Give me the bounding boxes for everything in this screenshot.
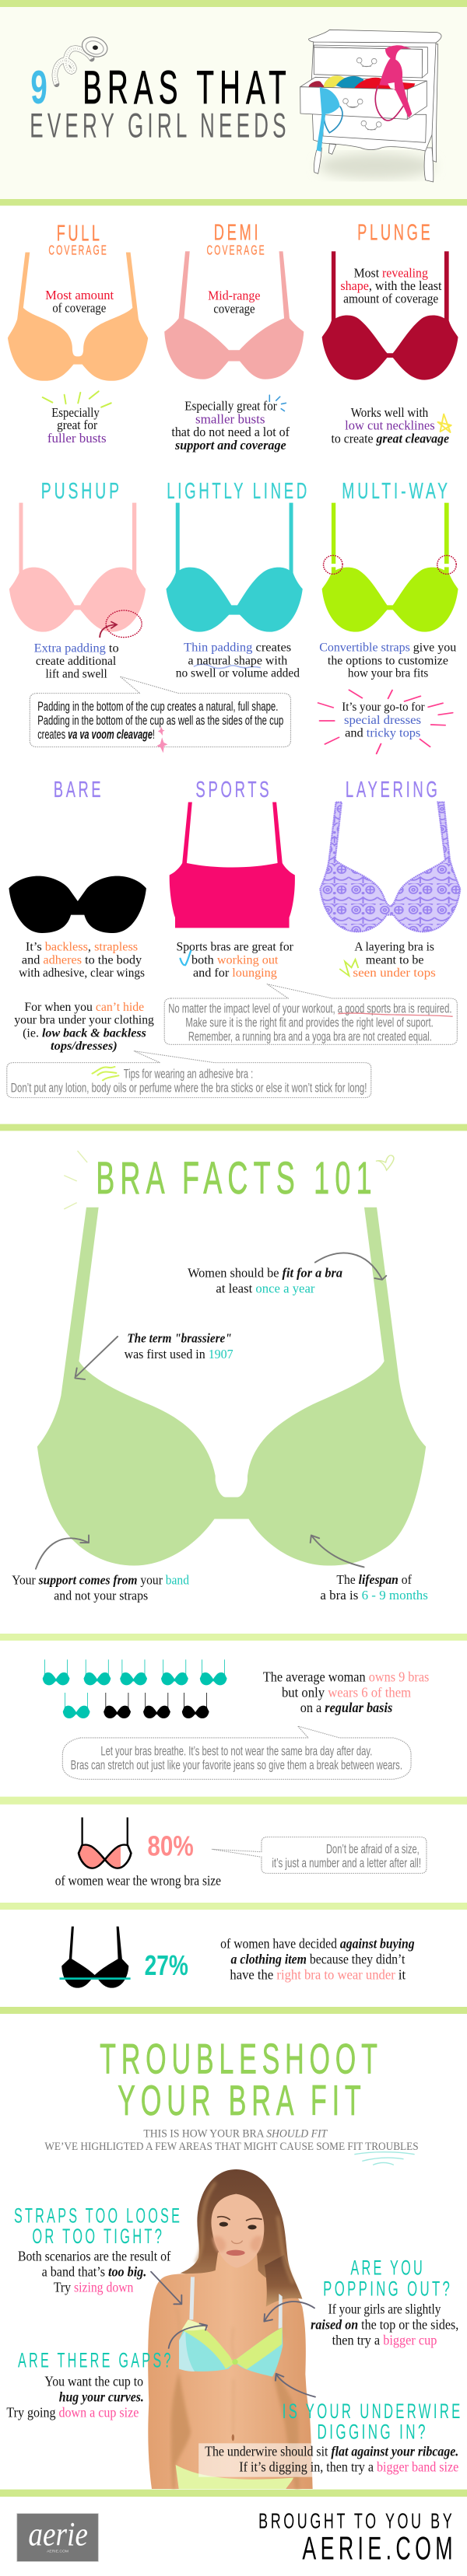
callout: adhesive tips xyxy=(7,1051,371,1098)
text: special dresses xyxy=(342,700,425,739)
text: lifespan xyxy=(320,1572,428,1603)
bra: pushup xyxy=(9,503,146,632)
logo: aerie xyxy=(17,2514,98,2561)
text: mid-range xyxy=(208,289,260,316)
bra: sports xyxy=(170,802,295,928)
text: gaps advice: hug your curves. xyxy=(59,2389,144,2405)
icon: 27 percent bra xyxy=(60,1927,131,1988)
text: seen under tops: meant to be xyxy=(366,952,424,966)
icon: 80 percent bra xyxy=(79,1817,131,1868)
heading: demi coverage: COVERAGE xyxy=(207,242,266,258)
text: most amount: of coverage xyxy=(52,302,106,316)
icon: strap circles xyxy=(324,555,456,574)
heading: full coverage: FULL xyxy=(57,221,103,246)
text: backless strapless xyxy=(19,940,145,980)
title: BRAS THAT xyxy=(83,61,292,114)
arrows: fit callouts xyxy=(151,2272,315,2397)
text: underwire advice xyxy=(205,2444,458,2475)
icon: blue check xyxy=(181,951,191,965)
text: popping advice xyxy=(311,2302,458,2348)
heading: pushup: PUSHUP xyxy=(41,478,122,504)
text: owns 9 bras: The average woman owns 9 bras xyxy=(263,1669,429,1685)
text: seen under tops xyxy=(353,940,436,980)
stat: 80%: 80% xyxy=(147,1831,194,1862)
stat: 27%: 27% xyxy=(145,1950,188,1981)
callout: padding: creates va va voom cleavage! xyxy=(37,727,155,742)
text: backless strapless: with adhesive, clear wings xyxy=(19,966,145,980)
text: gaps advice: Try going down a cup size xyxy=(6,2405,139,2420)
text: extra padding xyxy=(34,641,119,680)
text: seen under tops: A layering bra is xyxy=(354,940,434,953)
panel: translucent text backing xyxy=(198,2443,313,2477)
text: extra padding: Extra padding to xyxy=(34,641,119,655)
icon: pink burst xyxy=(318,690,453,753)
text: seen under tops: seen under tops xyxy=(353,966,436,980)
panel: bra facts xyxy=(12,1151,428,1603)
text: low cut necklines xyxy=(332,407,449,446)
bra: big green xyxy=(37,1208,426,1566)
bra: layering lace xyxy=(320,802,460,931)
panel: pushup xyxy=(9,478,290,753)
text: subtitle: THIS IS HOW YOUR BRA SHOULD FIT xyxy=(143,2127,328,2140)
icon: dresser with bras xyxy=(300,30,441,182)
text: smaller busts: support and coverage xyxy=(174,439,286,453)
heading: full coverage: COVERAGE xyxy=(48,242,108,258)
panel: underwire xyxy=(198,2400,463,2477)
icon: lime squiggle xyxy=(93,1067,118,1080)
heading: troubleshoot xyxy=(100,2036,383,2124)
text: convertible straps: the options to customize xyxy=(328,653,448,667)
bra: lightly lined xyxy=(167,503,303,632)
heading: straps: OR TOO TIGHT? xyxy=(32,2225,164,2248)
callout: sports bra xyxy=(164,984,457,1044)
text: special dresses: and tricky tops xyxy=(345,725,421,739)
bra: full coverage xyxy=(8,252,148,381)
text: lifespan: a bra is 6 - 9 months xyxy=(320,1588,428,1603)
text: most revealing: amount of coverage xyxy=(343,292,438,306)
text: convertible straps xyxy=(319,641,457,680)
text: gaps advice: You want the cup to xyxy=(44,2374,143,2389)
logo: aerie: AERIE.COM xyxy=(47,2550,68,2554)
text: against buying: have the right bra to wear under it xyxy=(230,1968,406,1983)
text: working out: Sports bras are great for xyxy=(177,940,293,953)
icon: lime crown xyxy=(339,959,358,976)
panel: footer xyxy=(0,2490,467,2567)
title: EVERY GIRL NEEDS xyxy=(30,107,290,145)
panel: multi-way xyxy=(318,478,458,753)
panel: troubleshoot xyxy=(0,2007,467,2165)
text: fuller busts xyxy=(47,407,107,446)
icon: yellow star xyxy=(437,414,451,432)
text: most revealing: shape, with the least xyxy=(340,280,442,293)
text: fit once a year: at least once a year xyxy=(216,1281,315,1296)
text: thin padding: no swell or volume added xyxy=(176,666,300,680)
text: wrong bra size: of women wear the wrong bra size xyxy=(55,1873,221,1889)
text: low cut necklines: Works well with xyxy=(351,407,428,420)
panel: bare xyxy=(9,777,154,1053)
heading: underwire xyxy=(283,2400,463,2444)
icon: rays and heart xyxy=(64,1151,394,1209)
text: thin padding: Thin padding creates xyxy=(184,641,292,654)
text: can't hide xyxy=(14,1000,154,1053)
bra: bare xyxy=(9,876,146,933)
panel: plunge xyxy=(322,220,458,446)
text: working out xyxy=(177,940,293,980)
bra: plunge xyxy=(322,251,458,380)
logo: aerie: aerie xyxy=(28,2515,88,2553)
text: mid-range: Mid-range xyxy=(208,289,260,303)
text: brassiere xyxy=(125,1331,234,1361)
text: most amount xyxy=(45,288,114,316)
text: straps advice: a band that’s too big. xyxy=(42,2264,146,2280)
text: fuller busts: great for xyxy=(57,419,98,432)
callout: padding xyxy=(30,676,290,753)
heading: sports: SPORTS xyxy=(195,777,272,802)
panel: gaps xyxy=(6,2349,174,2420)
text: straps advice xyxy=(18,2249,171,2295)
heading: straps xyxy=(14,2204,182,2248)
icon: tape measure xyxy=(54,34,110,84)
divider band: facts xyxy=(0,1124,467,1131)
text: brought to you by xyxy=(258,2510,457,2567)
panel: straps too loose xyxy=(14,2204,182,2295)
arrow: to right cup xyxy=(311,1535,364,1567)
icon: squiggle xyxy=(194,664,261,669)
text: subtitle xyxy=(44,2127,419,2153)
text: working out: both working out xyxy=(191,952,279,966)
heading: lightly lined: LIGHTLY LINED xyxy=(167,478,310,504)
icon: lime rays xyxy=(43,391,111,407)
title xyxy=(30,61,292,145)
text: smaller busts: that do not need a lot of xyxy=(171,426,290,439)
text: gaps advice xyxy=(6,2374,144,2420)
header panel xyxy=(0,0,467,205)
text: band support: and not your straps xyxy=(54,1589,148,1603)
text: extra padding: lift and swell xyxy=(46,667,107,680)
heading: bare: BARE xyxy=(54,777,104,802)
text: special dresses: special dresses xyxy=(344,713,421,727)
text: straps advice: Try sizing down xyxy=(54,2280,134,2295)
text: against buying xyxy=(220,1937,415,1983)
text: against buying: of women have decided against buying xyxy=(220,1937,415,1952)
panel: layering xyxy=(320,777,460,980)
text: owns 9 bras: on a regular basis xyxy=(300,1700,392,1716)
arrow: to left cup xyxy=(75,1337,118,1379)
bra: multi-way xyxy=(322,503,458,632)
text: smaller busts xyxy=(171,400,290,453)
text: can't hide: (ie. low back & backless xyxy=(23,1026,146,1040)
heading: popping xyxy=(323,2256,452,2301)
text: owns 9 bras: but only wears 6 of them xyxy=(282,1685,411,1700)
text: owns 9 bras xyxy=(263,1669,429,1716)
panel: lightly lined xyxy=(167,478,310,680)
callout: adhesive tips: Tips for wearing an adhesive bra : xyxy=(124,1067,253,1081)
bra: demi coverage xyxy=(164,251,304,379)
callout: padding: Padding in the bottom of the cup creates a natural, full shape. xyxy=(37,699,278,714)
text: working out: and for lounging xyxy=(193,966,277,980)
text: can't hide: your bra under your clothing xyxy=(14,1013,154,1026)
text: smaller busts: smaller busts xyxy=(195,413,265,427)
text: mid-range: coverage xyxy=(213,302,255,316)
icon: blue rays xyxy=(269,395,286,411)
text: extra padding: create additional xyxy=(36,654,116,668)
text: lifespan: The lifespan of xyxy=(336,1572,412,1587)
callout: don't be afraid xyxy=(212,1837,427,1873)
panel: owns 9 bras xyxy=(0,1634,467,1779)
text: popping advice: then try a bigger cup xyxy=(332,2333,437,2348)
heading: gaps: ARE THERE GAPS? xyxy=(18,2349,174,2372)
heading: straps: STRAPS TOO LOOSE xyxy=(14,2204,182,2228)
panel: 80 percent xyxy=(0,1797,467,1889)
text: straps advice: Both scenarios are the result of xyxy=(18,2249,171,2264)
panel: demi coverage xyxy=(164,220,304,453)
text: most revealing: Most revealing xyxy=(354,267,428,280)
chart: nine bras pictogram xyxy=(43,1659,227,1718)
icon: teal underlines xyxy=(354,2152,415,2165)
text: thin padding: a natural shape with xyxy=(188,653,288,667)
heading: demi coverage xyxy=(207,220,266,258)
text: fuller busts: Especially xyxy=(51,407,100,420)
text: can't hide: For when you can’t hide xyxy=(24,1000,145,1014)
icon: pink stars xyxy=(156,727,167,753)
panel: 27 percent xyxy=(0,1903,467,1988)
text: special dresses: It’s your go-to for xyxy=(342,700,425,714)
title: 9 xyxy=(30,61,47,114)
callout: let bras breathe xyxy=(62,1726,411,1779)
text: backless strapless: It’s backless, strapless xyxy=(26,940,138,953)
text: fit once a year: Women should be fit for a bra xyxy=(188,1266,343,1281)
icon: dotted circle and arrow xyxy=(100,610,142,638)
text: against buying: a clothing item because they didn’t xyxy=(231,1952,406,1967)
panel: popping out xyxy=(311,2256,458,2348)
text: low cut necklines: low cut necklines xyxy=(345,419,435,433)
photo: woman illustration xyxy=(148,2169,313,2489)
text: thin padding xyxy=(176,641,300,680)
text: smaller busts: Especially great for xyxy=(184,400,278,414)
arrow: to band xyxy=(36,1535,89,1569)
text: backless strapless: and adheres to the body xyxy=(22,952,142,966)
text: can't hide: tops/dresses) xyxy=(51,1039,118,1053)
heading: demi coverage: DEMI xyxy=(214,220,261,245)
text: most amount: Most amount xyxy=(45,288,114,302)
text: most revealing xyxy=(340,267,442,306)
text: brassiere: was first used in 1907 xyxy=(125,1347,234,1361)
text: fuller busts: fuller busts xyxy=(47,432,107,446)
text: band support xyxy=(12,1573,190,1603)
text: convertible straps: Convertible straps give you xyxy=(319,641,457,654)
text: convertible straps: how your bra fits xyxy=(348,666,429,680)
panel: sports xyxy=(164,777,457,1044)
heading: plunge: PLUNGE xyxy=(357,220,433,245)
text: low cut necklines: to create great cleavage xyxy=(332,432,449,446)
text: brassiere: The term "brassiere" xyxy=(127,1331,232,1346)
text: band support: Your support comes from your band xyxy=(12,1573,190,1588)
callout: padding: Padding in the bottom of the cup as well as the sides of the cup xyxy=(37,713,283,728)
arrow: to strap xyxy=(315,1253,386,1280)
panel: full coverage xyxy=(8,221,148,446)
heading: full coverage xyxy=(48,221,108,258)
text: fit once a year xyxy=(188,1266,343,1296)
